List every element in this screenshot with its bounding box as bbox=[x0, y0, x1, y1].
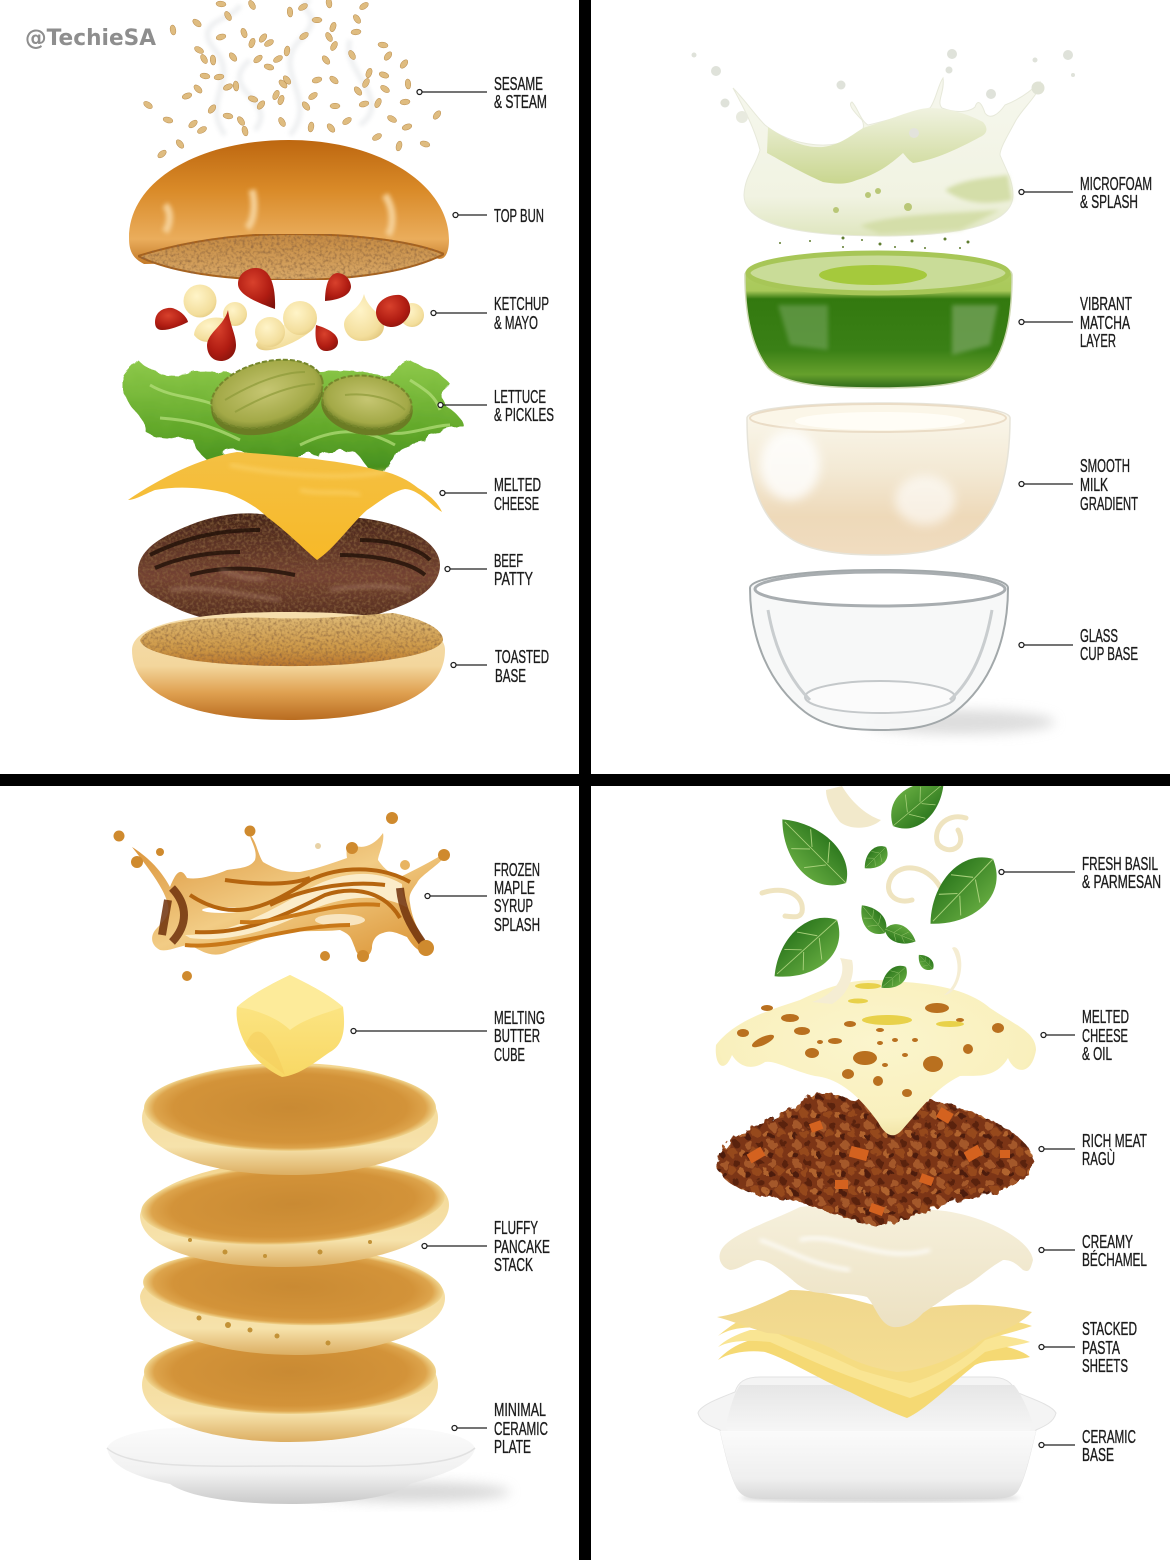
pancake 3 bbox=[140, 1244, 445, 1355]
label: melting butter cube bbox=[351, 1007, 545, 1065]
label: vibrant matcha layer: LAYER bbox=[1080, 330, 1116, 351]
label: melting butter cube: CUBE bbox=[494, 1044, 525, 1065]
label: melted cheese: CHEESE bbox=[494, 493, 539, 514]
label: top bun bbox=[453, 205, 544, 226]
microfoam splash bbox=[733, 78, 1044, 236]
label: toasted base: BASE bbox=[495, 665, 526, 686]
label: sesame and steam: SESAME bbox=[494, 73, 543, 94]
top bun bbox=[129, 140, 449, 280]
label: stacked pasta sheets bbox=[1039, 1318, 1137, 1376]
label: stacked pasta sheets: STACKED bbox=[1082, 1318, 1137, 1339]
label: stacked pasta sheets: SHEETS bbox=[1082, 1355, 1128, 1376]
icon: sesame seeds bbox=[142, 0, 442, 159]
label: stacked pasta sheets: PASTA bbox=[1082, 1337, 1120, 1358]
label: sesame and steam bbox=[417, 73, 547, 112]
label: lettuce and pickles: LETTUCE bbox=[494, 386, 546, 407]
glass cup base bbox=[750, 570, 1055, 734]
label: ceramic base: BASE bbox=[1082, 1444, 1114, 1465]
label: melted cheese: MELTED bbox=[494, 474, 541, 495]
label: ceramic base bbox=[1039, 1426, 1136, 1465]
label: smooth milk gradient: MILK bbox=[1080, 474, 1108, 495]
label: frozen maple syrup splash: MAPLE bbox=[494, 877, 535, 898]
label: toasted base bbox=[451, 646, 549, 686]
label: ketchup and mayo bbox=[431, 293, 549, 333]
melted cheese and oil bbox=[716, 980, 1036, 1135]
pancake 4 bbox=[142, 1328, 438, 1442]
label: rich meat ragu: RAGÙ bbox=[1082, 1148, 1115, 1169]
label: ceramic base: CERAMIC bbox=[1082, 1426, 1136, 1447]
label: melted cheese and oil: MELTED bbox=[1082, 1006, 1129, 1027]
smooth milk bowl bbox=[747, 403, 1010, 555]
label: frozen maple syrup splash bbox=[425, 859, 540, 935]
label: microfoam and splash: & SPLASH bbox=[1080, 191, 1138, 212]
label: melting butter cube: BUTTER bbox=[494, 1025, 540, 1046]
label: minimal ceramic plate: CERAMIC bbox=[494, 1418, 548, 1439]
burger labels bbox=[417, 73, 554, 686]
label: rich meat ragu bbox=[1039, 1130, 1147, 1169]
panel: lasagna bbox=[698, 768, 1056, 1502]
label: frozen maple syrup splash: FROZEN bbox=[494, 859, 540, 880]
melted cheese bbox=[128, 452, 442, 560]
label: minimal ceramic plate: MINIMAL bbox=[494, 1399, 546, 1420]
rich meat ragu bbox=[718, 1093, 1033, 1224]
icon: milk droplets bbox=[692, 49, 1075, 108]
label: ketchup and mayo: KETCHUP bbox=[494, 293, 549, 314]
label: creamy bechamel: CREAMY bbox=[1082, 1231, 1133, 1252]
pancake 2 bbox=[139, 1156, 449, 1267]
toasted base bun bbox=[132, 612, 445, 720]
label: fluffy pancake stack: FLUFFY bbox=[494, 1217, 538, 1238]
lettuce and pickles bbox=[123, 348, 462, 477]
label: frozen maple syrup splash: SYRUP bbox=[494, 895, 533, 916]
panel: burger bbox=[123, 0, 462, 720]
ceramic plate bbox=[107, 1427, 510, 1504]
label: melted cheese bbox=[440, 474, 541, 514]
label: top bun: TOP BUN bbox=[494, 205, 544, 226]
watermark: @TechieSA bbox=[25, 26, 156, 51]
label: glass cup base: GLASS bbox=[1080, 625, 1118, 646]
label: melted cheese and oil: & OIL bbox=[1082, 1043, 1112, 1064]
label: fluffy pancake stack: PANCAKE bbox=[494, 1236, 550, 1257]
label: minimal ceramic plate: PLATE bbox=[494, 1436, 531, 1457]
parmesan shavings bbox=[762, 786, 966, 1004]
label: minimal ceramic plate bbox=[452, 1399, 548, 1457]
ceramic base dish bbox=[698, 1377, 1056, 1502]
label: ketchup and mayo: & MAYO bbox=[494, 312, 538, 333]
label: microfoam and splash bbox=[1019, 173, 1152, 212]
melting butter cube bbox=[237, 975, 344, 1077]
icon: steam bbox=[207, 0, 372, 135]
label: glass cup base bbox=[1019, 625, 1138, 664]
label: smooth milk gradient: SMOOTH bbox=[1080, 455, 1130, 476]
label: beef patty: PATTY bbox=[494, 568, 533, 589]
label: sesame and steam: & STEAM bbox=[494, 91, 547, 112]
maple syrup splash bbox=[114, 812, 450, 981]
pancake labels bbox=[351, 859, 550, 1457]
label: lettuce and pickles bbox=[438, 386, 554, 425]
label: smooth milk gradient bbox=[1019, 455, 1138, 514]
label: melted cheese and oil: CHEESE bbox=[1082, 1025, 1128, 1046]
label: melted cheese and oil bbox=[1041, 1006, 1129, 1064]
label: fresh basil and parmesan bbox=[999, 853, 1161, 892]
matcha powder specks bbox=[779, 236, 970, 249]
basil leaves bbox=[761, 768, 1012, 995]
creamy bechamel bbox=[719, 1205, 1033, 1327]
pancake stack bbox=[139, 1063, 449, 1442]
matcha labels bbox=[1019, 173, 1152, 664]
label: vibrant matcha layer bbox=[1019, 293, 1132, 351]
label: toasted base: TOASTED bbox=[495, 646, 549, 667]
label: vibrant matcha layer: MATCHA bbox=[1080, 312, 1130, 333]
panel: matcha bbox=[692, 49, 1075, 734]
label: beef patty: BEEF bbox=[494, 550, 523, 571]
melted cheese base layer and beef patty bbox=[138, 513, 440, 628]
label: beef patty bbox=[445, 550, 533, 589]
lasagna labels bbox=[999, 853, 1161, 1465]
label: creamy bechamel bbox=[1039, 1231, 1147, 1270]
ketchup and mayo bbox=[155, 268, 424, 361]
vibrant matcha bowl bbox=[745, 253, 1012, 388]
label: melting butter cube: MELTING bbox=[494, 1007, 545, 1028]
pancake 1 bbox=[142, 1063, 438, 1175]
label: fluffy pancake stack: STACK bbox=[494, 1254, 533, 1275]
label: vibrant matcha layer: VIBRANT bbox=[1080, 293, 1132, 314]
panel: pancakes bbox=[107, 812, 510, 1504]
stacked pasta sheets bbox=[717, 1290, 1032, 1418]
label: lettuce and pickles: & PICKLES bbox=[494, 404, 554, 425]
label: fluffy pancake stack bbox=[422, 1217, 550, 1275]
label: frozen maple syrup splash: SPLASH bbox=[494, 914, 540, 935]
